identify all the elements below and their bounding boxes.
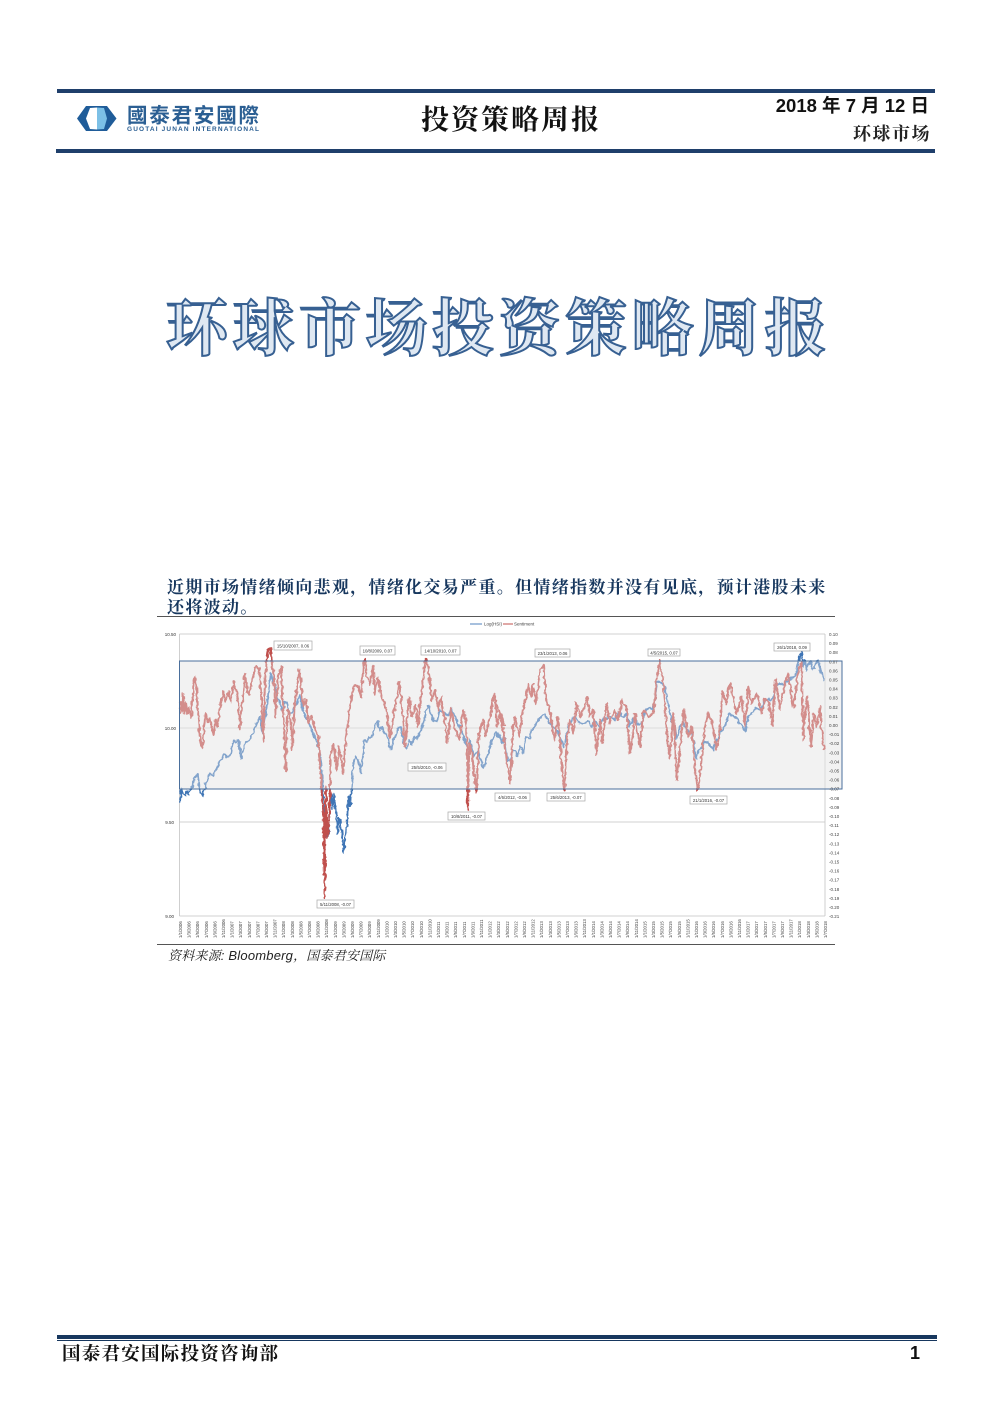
footer rule (57, 1335, 937, 1341)
peak and trough labels: 25/6/2013, -0.07 (550, 795, 582, 800)
x axis dates: 1/11/2011 (479, 919, 484, 938)
right axis: 0.02 (829, 705, 838, 710)
x axis dates: 1/7/2011 (462, 921, 467, 938)
right axis: 0.08 (829, 650, 838, 655)
x axis dates: 1/11/2013 (582, 919, 587, 938)
line: log HSI (180, 652, 824, 853)
x axis dates: 1/5/2009 (350, 921, 355, 938)
right axis: -0.06 (829, 778, 840, 783)
x axis dates: 1/9/2012 (522, 921, 527, 938)
left axis: 10.50 (165, 632, 176, 637)
right axis: 0.03 (829, 696, 838, 701)
main title: 环球市场投资策略周报 (166, 296, 831, 364)
peak and trough labels: 23/1/2013, 0.06 (538, 651, 568, 656)
x axis dates: 1/9/2007 (264, 921, 269, 938)
chart bottom rule (157, 944, 835, 945)
x axis dates: 1/7/2014 (617, 921, 622, 938)
x axis dates: 1/9/2010 (419, 921, 424, 938)
right axis: -0.05 (829, 768, 840, 774)
right axis: -0.19 (829, 896, 840, 901)
right axis: -0.10 (829, 814, 840, 819)
left axis (165, 632, 176, 919)
x axis dates: 1/3/2007 (238, 921, 243, 938)
x axis dates: 1/3/2006 (187, 921, 192, 938)
x axis dates: 1/3/2009 (341, 921, 346, 938)
right axis: -0.15 (829, 860, 840, 864)
right axis: -0.09 (829, 805, 840, 810)
peak and trough labels: 10/8/2011, -0.07 (451, 814, 483, 819)
peak and trough labels: 5/11/2008, -0.07 (320, 902, 352, 907)
x axis dates: 1/11/2017 (789, 919, 794, 938)
left axis: 10.00 (165, 726, 176, 731)
band: normal sentiment range (180, 661, 842, 789)
chart heading (167, 578, 827, 616)
peak and trough labels: 14/10/2010, 0.07 (424, 648, 457, 654)
x axis dates: 1/1/2015 (642, 921, 647, 938)
x axis dates: 1/1/2017 (746, 921, 751, 938)
x axis dates: 1/3/2010 (393, 921, 398, 938)
x axis dates: 1/9/2013 (574, 921, 579, 938)
x axis dates: 1/5/2007 (247, 921, 252, 938)
chart heading: 还将波动。 (167, 598, 259, 616)
x axis dates: 1/1/2012 (488, 921, 493, 938)
x axis dates: 1/9/2011 (470, 921, 475, 938)
right axis: -0.16 (829, 869, 840, 874)
x axis dates: 1/9/2014 (625, 921, 630, 938)
x axis dates: 1/5/2011 (453, 921, 458, 938)
x axis dates: 1/11/2012 (531, 919, 536, 938)
x axis dates: 1/5/2006 (195, 921, 200, 938)
right axis: 0.04 (829, 687, 838, 692)
page number: 1 (910, 1343, 920, 1363)
left axis: 9.00 (165, 914, 174, 919)
x axis dates: 1/5/2016 (711, 921, 716, 938)
x axis dates: 1/9/2017 (780, 921, 785, 938)
right axis: -0.11 (829, 823, 839, 828)
x axis dates: 1/5/2008 (298, 921, 303, 938)
peak and trough labels: 10/8/2009, 0.07 (363, 648, 393, 654)
x axis dates: 1/11/2014 (634, 919, 639, 938)
peak and trough labels: 25/5/2010, -0.06 (411, 765, 443, 770)
right axis: -0.04 (829, 759, 840, 764)
legend: Log(HSI) (484, 622, 503, 626)
peak and trough labels: 15/10/2007, 0.06 (277, 644, 310, 648)
x axis dates: 1/11/2008 (324, 919, 329, 938)
right axis: 0.01 (829, 714, 838, 719)
x axis dates: 1/1/2014 (591, 921, 596, 938)
right axis: -0.07 (829, 787, 840, 792)
x axis dates: 1/5/2012 (505, 921, 510, 938)
x axis dates: 1/1/2007 (230, 921, 235, 938)
x axis dates: 1/5/2015 (660, 921, 665, 938)
x axis dates: 1/7/2010 (410, 921, 415, 938)
x axis dates: 1/1/2018 (797, 921, 802, 938)
right axis: -0.14 (829, 850, 840, 855)
legend (470, 622, 535, 626)
x axis dates: 1/7/2015 (668, 921, 673, 938)
right axis: -0.13 (829, 841, 840, 846)
x axis dates: 1/11/2009 (376, 919, 381, 938)
x axis dates: 1/3/2012 (496, 921, 501, 938)
x axis dates: 1/9/2009 (367, 921, 372, 938)
logo: Guotai Junan International (77, 103, 260, 133)
line: sentiment (180, 648, 824, 898)
x axis dates: 1/7/2009 (359, 921, 364, 938)
peak and trough labels (274, 641, 810, 908)
x axis dates: 1/11/2016 (737, 919, 742, 938)
x axis dates: 1/5/2014 (608, 921, 613, 938)
x axis dates (178, 919, 828, 938)
header category: 环球市场 (853, 124, 931, 144)
right axis: -0.17 (829, 878, 840, 883)
x axis dates: 1/3/2018 (806, 921, 811, 938)
peak and trough labels: 26/1/2018, 0.09 (777, 645, 808, 650)
x axis dates: 1/7/2008 (307, 921, 312, 938)
peak and trough labels: 4/5/2015, 0.07 (650, 650, 678, 656)
x axis dates: 1/11/2007 (273, 919, 278, 938)
x axis dates: 1/1/2006 (178, 921, 183, 938)
right axis: -0.03 (829, 750, 840, 755)
right axis: 0.10 (829, 632, 838, 637)
footer organisation name: 国泰君安国际投资咨询部 (62, 1345, 279, 1365)
x axis dates: 1/1/2008 (281, 921, 286, 938)
chart heading: 近期市场情绪倾向悲观，情绪化交易严重。但情绪指数并没有见底，预计港股未来 (167, 578, 827, 597)
x axis dates: 1/3/2008 (290, 921, 295, 938)
x axis dates: 1/11/2010 (427, 919, 432, 938)
left axis: 9.50 (165, 820, 174, 825)
right axis: -0.02 (829, 741, 840, 746)
x axis dates: 1/3/2013 (548, 921, 553, 938)
x axis dates: 1/9/2008 (316, 921, 321, 938)
x axis dates: 1/7/2013 (565, 921, 570, 938)
chart: log HSI and sentiment (165, 622, 842, 938)
right axis: 0.09 (829, 641, 838, 646)
right axis: -0.12 (829, 832, 840, 837)
right axis (829, 632, 840, 919)
right axis: -0.21 (829, 914, 840, 919)
x axis dates: 1/9/2006 (212, 921, 217, 938)
x axis dates: 1/11/2015 (685, 919, 690, 938)
x axis dates: 1/7/2007 (255, 921, 260, 938)
x axis dates: 1/5/2017 (763, 921, 768, 938)
header title: 投资策略周报 (421, 105, 601, 136)
x axis dates: 1/5/2018 (814, 921, 819, 938)
right axis: 0.06 (829, 668, 838, 673)
x axis dates: 1/7/2012 (513, 921, 518, 938)
right axis: 0.05 (829, 678, 838, 682)
x axis dates: 1/1/2010 (384, 921, 389, 938)
x axis dates: 1/3/2011 (445, 921, 450, 938)
x axis dates: 1/11/2006 (221, 919, 226, 938)
x axis dates: 1/3/2015 (651, 921, 656, 938)
x axis dates: 1/1/2009 (333, 921, 338, 938)
right axis: -0.20 (829, 905, 840, 910)
x axis dates: 1/3/2016 (703, 921, 708, 938)
x axis dates: 1/3/2017 (754, 921, 759, 938)
x axis dates: 1/1/2013 (539, 921, 544, 938)
logo: Guotai Junan International: GUOTAI JUNAN INTERNATIONAL (127, 126, 259, 133)
x axis dates: 1/5/2013 (556, 921, 561, 938)
right axis: 0.00 (829, 723, 838, 728)
x axis dates: 1/9/2016 (728, 921, 733, 938)
peak and trough labels: 21/1/2016, -0.07 (693, 798, 725, 803)
x axis dates: 1/7/2018 (823, 921, 828, 938)
x axis dates: 1/3/2014 (599, 921, 604, 938)
chart top rule (157, 616, 835, 617)
right axis: -0.18 (829, 887, 840, 892)
x axis dates: 1/7/2006 (204, 921, 209, 938)
right axis: -0.01 (829, 732, 840, 737)
x axis dates: 1/1/2011 (436, 921, 441, 938)
x axis dates: 1/7/2016 (720, 921, 725, 938)
header top rule (57, 89, 935, 93)
right axis: -0.08 (829, 796, 840, 801)
header bottom rule (56, 149, 935, 153)
x axis dates: 1/1/2016 (694, 921, 699, 938)
x axis dates: 1/9/2015 (677, 921, 682, 938)
header date: 2018 年 7 月 12 日 (776, 95, 929, 116)
legend: Sentiment (514, 622, 535, 626)
x axis dates: 1/5/2010 (402, 921, 407, 938)
source note: 资料来源: Bloomberg，国泰君安国际 (168, 948, 386, 963)
right axis: 0.07 (829, 659, 838, 664)
peak and trough labels: 4/6/2012, -0.06 (498, 795, 528, 800)
x axis dates: 1/7/2017 (771, 921, 776, 938)
